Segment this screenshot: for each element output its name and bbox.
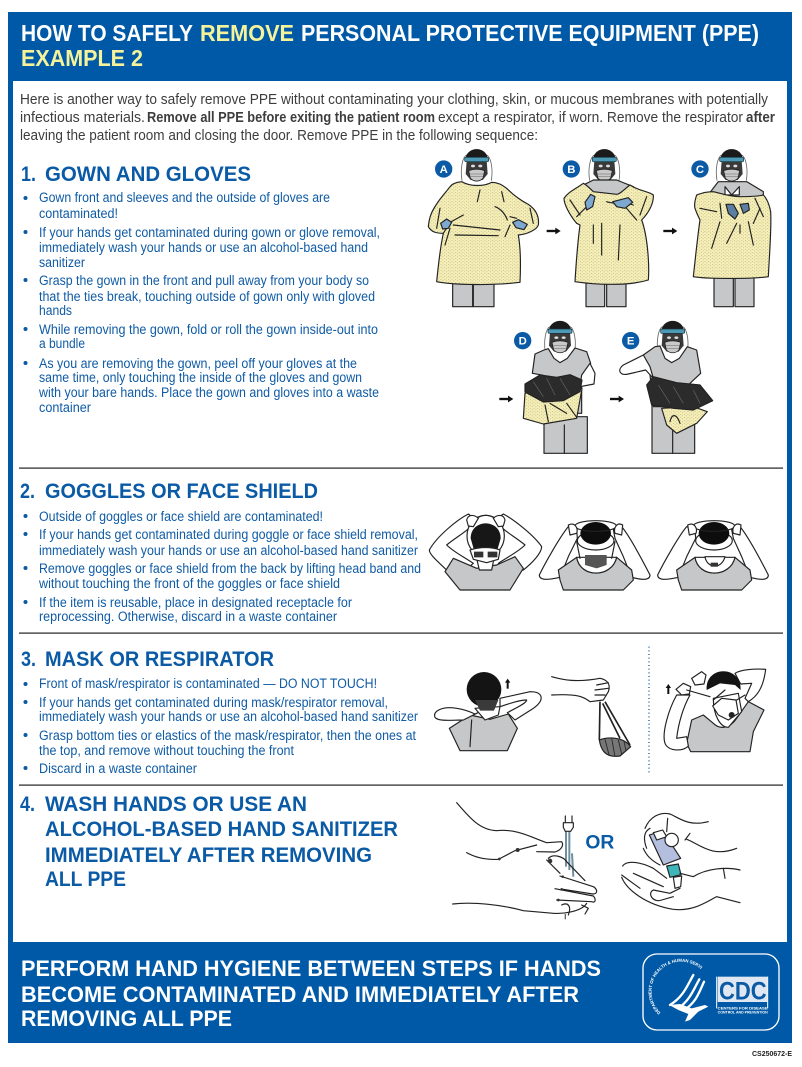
section 3 bullets bbox=[24, 676, 418, 776]
section 1 bullets: Grasp the gown in the front and pull away from your body so bbox=[39, 273, 369, 288]
face shield figure with mask bbox=[539, 521, 650, 590]
section 3 heading: 3. bbox=[21, 648, 36, 671]
badge E bbox=[622, 332, 639, 349]
section 1 bullets: While removing the gown, fold or roll the gown inside-out into bbox=[39, 322, 378, 337]
badge E: E bbox=[627, 336, 635, 348]
section 4 heading bbox=[20, 793, 398, 891]
illustrations: gown removal steps A B C bbox=[428, 149, 771, 307]
intro text: leaving the patient room and closing the door. Remove PPE in the following sequence: bbox=[20, 127, 538, 144]
HHS and CDC logo bbox=[642, 953, 780, 1031]
illustrations: removing mask or respirator bbox=[435, 647, 766, 775]
arrow to D bbox=[499, 396, 513, 402]
section 2 bullets: immediately wash your hands or use an alcohol-based hand sanitizer bbox=[39, 543, 418, 558]
CDC logo mark: CDC bbox=[719, 977, 767, 1005]
badge A bbox=[435, 160, 452, 178]
section 3 heading: MASK OR RESPIRATOR bbox=[45, 648, 274, 671]
HHS seal ring text bbox=[648, 958, 702, 1015]
respirator figure bbox=[658, 521, 768, 590]
publication code: CS250672-E bbox=[752, 1049, 792, 1058]
section 2 bullets: Remove goggles or face shield from the back by lifting head band and bbox=[39, 561, 421, 576]
title: REMOVE bbox=[200, 20, 294, 46]
badge D: D bbox=[519, 336, 527, 348]
goggles figure, from behind bbox=[429, 514, 542, 590]
section 1 bullets: contaminated! bbox=[39, 206, 118, 221]
divider 2 bbox=[19, 632, 783, 634]
intro text bbox=[20, 91, 775, 144]
front view respirator figure bbox=[664, 669, 766, 752]
section 4 heading: ALL PPE bbox=[45, 868, 126, 891]
badge C bbox=[691, 160, 709, 178]
section 3 bullets: If your hands get contaminated during mask/respirator removal, bbox=[39, 695, 388, 710]
section 1 bullets: If your hands get contaminated during gown or glove removal, bbox=[39, 225, 380, 240]
section 1 bullets bbox=[24, 190, 380, 415]
step E figure bbox=[620, 321, 713, 453]
OR label: OR bbox=[585, 831, 614, 853]
section 1 heading: 1. bbox=[21, 163, 36, 186]
section 2 bullets: If your hands get contaminated during goggle or face shield removal, bbox=[39, 527, 418, 542]
section 2 bullets: Outside of goggles or face shield are contaminated! bbox=[39, 509, 323, 524]
footer message: PERFORM HAND HYGIENE BETWEEN STEPS IF HANDS bbox=[21, 956, 601, 981]
intro text: Remove all PPE before exiting the patient room bbox=[147, 109, 435, 126]
step D figure bbox=[523, 321, 595, 453]
HHS eagle bbox=[669, 975, 708, 1022]
title: PERSONAL PROTECTIVE EQUIPMENT (PPE) bbox=[301, 20, 759, 46]
arrow B to C bbox=[663, 228, 677, 234]
illustrations: gown removal steps D E bbox=[499, 321, 713, 453]
illustrations: hand washing and sanitizer bbox=[453, 803, 740, 919]
footer message: BECOME CONTAMINATED AND IMMEDIATELY AFTER bbox=[21, 982, 579, 1007]
badge C: C bbox=[696, 164, 704, 176]
section 2 bullets: reprocessing. Otherwise, discard in a waste container bbox=[39, 609, 337, 624]
section 3 bullets: immediately wash your hands or use an alcohol-based hand sanitizer bbox=[39, 709, 418, 724]
section 4 heading: 4. bbox=[20, 793, 35, 816]
section 1 bullets: same time, only touching the inside of the gloves and gown bbox=[39, 370, 362, 385]
footer message bbox=[21, 956, 601, 1031]
HHS seal ring text: DEPARTMENT OF HEALTH & HUMAN SERVICES USA bbox=[648, 958, 702, 1015]
section 1 bullets: sanitizer bbox=[39, 255, 85, 270]
washing hands under faucet bbox=[453, 803, 597, 919]
illustrations: removing goggles or face shield bbox=[429, 514, 768, 590]
badge A: A bbox=[440, 164, 448, 176]
dotted divider bbox=[647, 647, 651, 775]
section 1 bullets: a bundle bbox=[39, 336, 85, 351]
back of head figure bbox=[435, 672, 541, 751]
section 3 bullets: Grasp bottom ties or elastics of the mask/respirator, then the ones at bbox=[39, 728, 416, 743]
title bbox=[21, 20, 759, 71]
section 3 bullets: Discard in a waste container bbox=[39, 761, 197, 776]
divider 1 bbox=[19, 468, 783, 469]
section 1 bullets: immediately wash your hands or use an alcohol-based hand bbox=[39, 240, 368, 255]
up arrow at head bbox=[505, 679, 510, 689]
section 4 heading: ALCOHOL-BASED HAND SANITIZER bbox=[45, 818, 398, 841]
section 2 heading: 2. bbox=[20, 480, 35, 503]
step C figure bbox=[693, 149, 771, 307]
section 3 bullets: Front of mask/respirator is contaminated — DO NOT TOUCH! bbox=[39, 676, 377, 691]
section 2 heading: GOGGLES OR FACE SHIELD bbox=[45, 480, 318, 503]
section 1 bullets: As you are removing the gown, peel off your gloves at the bbox=[39, 356, 357, 371]
step A figure bbox=[428, 149, 539, 307]
section 1 bullets: container bbox=[39, 400, 91, 415]
intro text: after bbox=[746, 109, 775, 126]
divider 3 bbox=[19, 784, 783, 786]
sanitizer bottle and hands bbox=[622, 813, 740, 910]
up arrow at raised hand bbox=[666, 684, 671, 694]
section 4 heading: WASH HANDS OR USE AN bbox=[45, 793, 307, 816]
arrow to E bbox=[610, 396, 624, 402]
section 2 bullets: without touching the front of the goggles or face shield bbox=[38, 576, 340, 591]
section 1 bullets: hands bbox=[39, 303, 72, 318]
section 2 bullets bbox=[24, 509, 421, 624]
section 1 bullets: Gown front and sleeves and the outside of gloves are bbox=[39, 190, 330, 205]
title: EXAMPLE 2 bbox=[21, 45, 143, 71]
intro text: except a respirator, if worn. Remove the respirator bbox=[438, 109, 743, 126]
section 1 bullets: that the ties break, touching outside of gown only with gloved bbox=[39, 289, 375, 304]
CDC logo mark bbox=[717, 977, 768, 1014]
section 2 bullets: If the item is reusable, place in designated receptacle for bbox=[39, 595, 352, 610]
step B figure bbox=[564, 149, 653, 307]
footer message: REMOVING ALL PPE bbox=[21, 1006, 232, 1031]
CDC logo mark: CONTROL AND PREVENTION bbox=[718, 1010, 768, 1014]
arrow A to B bbox=[547, 228, 561, 234]
badge B: B bbox=[567, 164, 575, 176]
hand holding mask bbox=[552, 677, 631, 757]
badge B bbox=[563, 160, 580, 178]
title: HOW TO SAFELY bbox=[21, 20, 193, 46]
badge D bbox=[514, 332, 531, 349]
section 1 bullets: with your bare hands. Place the gown and gloves into a waste bbox=[38, 385, 379, 400]
section 3 bullets: the top, and remove without touching the front bbox=[39, 743, 294, 758]
CDC logo mark: CENTERS FOR DISEASE bbox=[718, 1006, 768, 1010]
section 4 heading: IMMEDIATELY AFTER REMOVING bbox=[45, 844, 372, 867]
section 1 heading: GOWN AND GLOVES bbox=[45, 163, 251, 186]
intro text: infectious materials. bbox=[20, 109, 145, 126]
